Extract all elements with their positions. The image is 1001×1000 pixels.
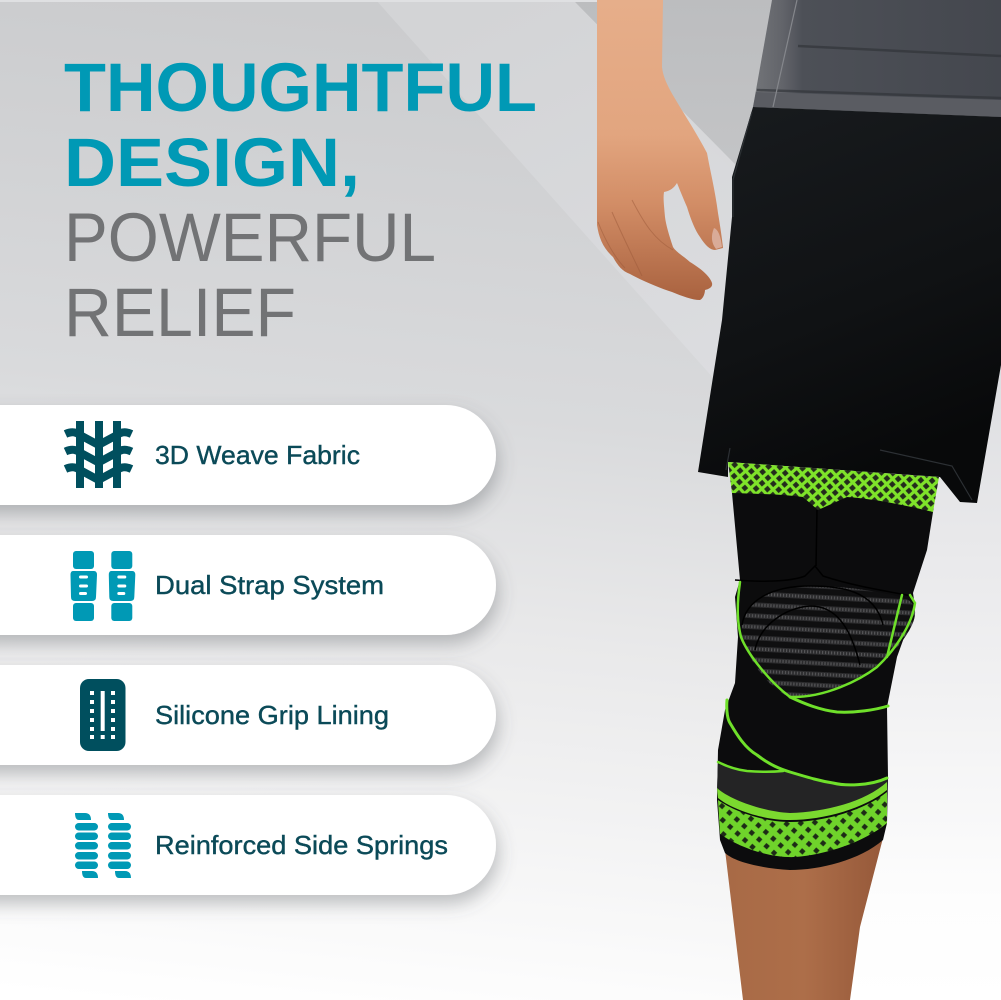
upper mesh band	[728, 462, 939, 512]
icon: silicone grip	[80, 679, 126, 751]
icon: side springs	[75, 813, 131, 878]
lower leg	[725, 838, 883, 1000]
shorts	[698, 107, 1001, 503]
knee pad	[742, 586, 916, 696]
panel: Silicone Grip Lining: Silicone Grip Lining	[155, 700, 389, 730]
title: POWERFUL	[64, 199, 436, 276]
knee brace	[717, 462, 939, 870]
title: THOUGHTFUL	[64, 49, 537, 126]
panel: Reinforced Side Springs	[0, 795, 496, 895]
shirt	[753, 0, 1001, 117]
diagonal green strap	[718, 700, 887, 785]
icon: weave	[66, 421, 132, 488]
title: RELIEF	[64, 274, 296, 351]
panel: Reinforced Side Springs: Reinforced Side Springs	[155, 830, 448, 860]
panel: Dual Strap System	[0, 535, 496, 635]
textured wrap strap	[717, 764, 887, 815]
icon: dual straps	[70, 551, 135, 621]
lower mesh band	[718, 792, 887, 857]
title	[64, 49, 537, 351]
green straps	[738, 582, 915, 712]
title: DESIGN,	[64, 124, 360, 201]
arm and hand	[597, 0, 723, 300]
panel: Silicone Grip Lining	[0, 665, 496, 765]
panel: 3D Weave Fabric: 3D Weave Fabric	[155, 440, 360, 470]
panel: Dual Strap System: Dual Strap System	[155, 570, 384, 600]
panel: 3D Weave Fabric	[0, 405, 496, 505]
thick green strap	[717, 782, 887, 820]
brace seams	[735, 510, 912, 596]
